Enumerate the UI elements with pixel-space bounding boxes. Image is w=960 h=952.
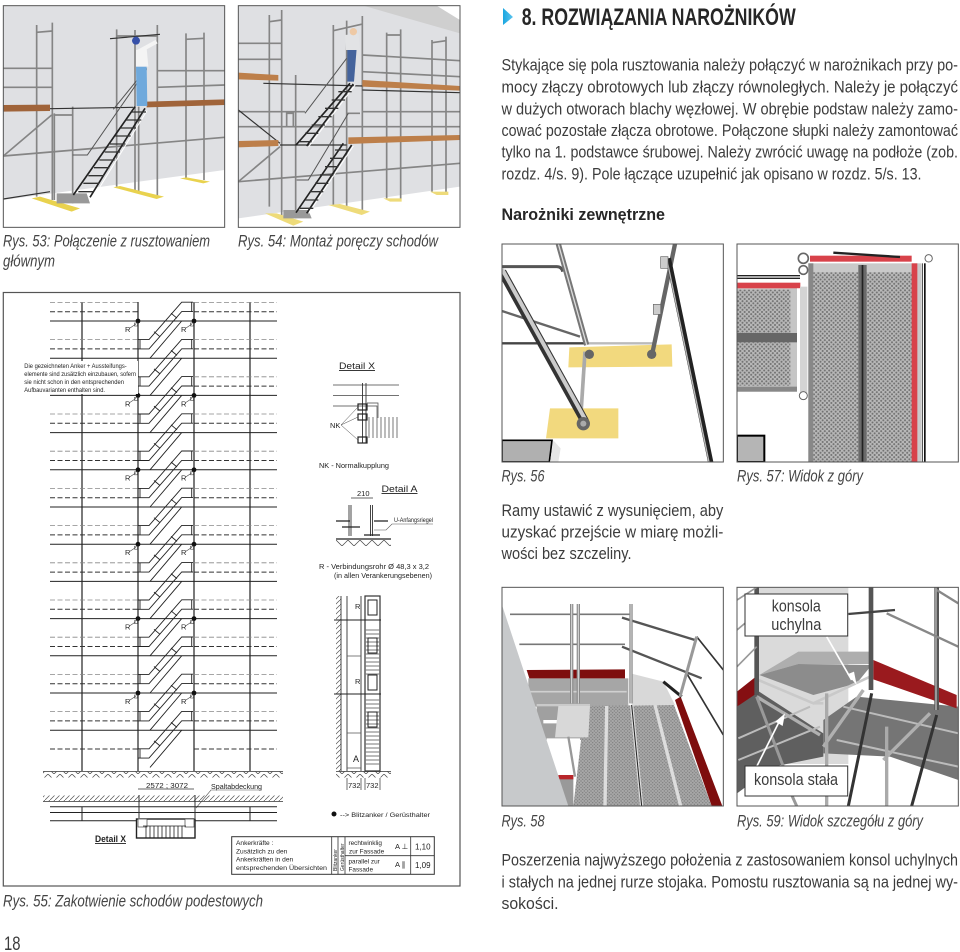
label: konsola stała [745,766,848,796]
side elevation: R [355,602,361,611]
elevation of stair tower: R [125,400,131,408]
table: anchor forces: Ankerkräften in den [236,856,294,864]
panel: Rys. 57 view from above [737,244,958,462]
Detail A drawing: 210 [357,489,370,498]
caption: Rys. 53: Rys. 53: Połączenie z rusztowaniem [3,232,210,251]
label: konsola uchylna: konsola [772,598,822,616]
note: anchors: Aufbauvarianten enthalten sind. [24,387,105,394]
side elevation: --> Blitzanker / Gerüsthalter [340,812,431,819]
caption: Rys. 53 [3,232,210,271]
panel: Rys. 56 base plates [502,244,723,462]
Detail A drawing: U-Anfangsriegel [394,518,433,524]
text block: frames offset [501,501,724,563]
caption: Rys. 57: Rys. 57: Widok z góry [737,467,864,486]
elevation of stair tower: R [181,548,187,557]
table: anchor forces: Ankerkräfte : [236,840,274,847]
note: anchors: sie nicht schon in den entsprechenden [24,379,124,386]
text block: frames offset: uzyskać przejście w miarę możli- [502,522,723,542]
table: anchor forces: A ⊥ [395,842,409,851]
elevation of stair tower: R [125,325,131,334]
side elevation: A [353,754,359,764]
side elevation: 732 [366,781,379,790]
caption: Rys. 54: Rys. 54: Montaż poręczy schodów [238,232,439,251]
table: anchor forces: Gerüsthalter [340,843,346,871]
panel: Rys. 54 handrail assembly [238,6,460,227]
elevation of stair tower: R [125,622,131,632]
Detail X drawing [319,361,399,470]
intro text block [501,56,958,184]
panel: Rys. 53 scaffold connected to main scaffold [3,6,225,227]
panel: Rys. 59 detail view with consoles [737,587,958,806]
elevation of stair tower: R [181,622,187,632]
text block: consoles [502,851,958,913]
caption: Rys. 58: Rys. 58 [502,812,545,831]
table: anchor forces: 1,09 [415,861,431,870]
Detail X drawing: NK [330,421,340,430]
elevation of stair tower: R [181,400,187,408]
note: anchors: elemente sind zusätzlich einzubauen, sofern [24,371,136,378]
elevation of stair tower: R [125,474,131,482]
side elevation: 732 [348,781,361,790]
table: anchor forces [232,837,434,874]
Detail A drawing: Detail A [382,484,418,494]
text block: consoles: sokości. [502,894,558,913]
caption: Rys. 55: Rys. 55: Zakotwienie schodów podestowych [3,892,263,911]
label: konsola uchylna: uchylna [771,616,822,634]
table: anchor forces: 1,10 [415,842,431,852]
note: anchors: Die gezeichneten Anker + Aussteifungs- [24,363,127,370]
title: 8. ROZWIĄZANIA NAROŻNIKÓW [522,3,796,31]
label: konsola uchylna [745,594,848,636]
side elevation [332,596,431,819]
elevation of stair tower: R [181,474,187,482]
table: anchor forces: entsprechenden Übersichten [236,864,327,872]
elevation of stair tower: R [181,325,187,334]
text block: frames offset: wości bez szczeliny. [501,544,632,563]
caption: Rys. 56: Rys. 56 [502,467,545,486]
table: anchor forces: Fassade [348,866,373,874]
note: anchors [22,361,138,394]
Detail A drawing: (in allen Verankerungsebenen) [334,571,432,580]
label: konsola stała: konsola stała [754,771,839,789]
table: anchor forces: rechtwinklig [348,840,382,847]
table: anchor forces: Blitzanker [333,849,339,871]
table: anchor forces: A ∥ [395,860,405,869]
table: anchor forces: parallel zur [348,858,381,866]
side elevation: R [355,677,361,686]
elevation of stair tower: R [125,697,131,706]
subheading: Narożniki zewnętrzne [502,205,665,224]
panel: Rys. 55 anchoring drawing [3,292,460,886]
elevation of stair tower: R [181,697,187,706]
Detail X drawing: Detail X [339,361,375,371]
caption: Rys. 53: głównym [3,252,55,271]
Detail A drawing: R - Verbindungsrohr Ø 48,3 x 3,2 [319,562,429,571]
panel: Rys. 58 top level widening [502,587,723,806]
blue arrow bullet [503,8,513,25]
table: anchor forces: zur Fassade [349,848,385,856]
Detail A drawing [319,484,433,580]
plan view and dimensions: 2572 ; 3072 [146,781,188,790]
Detail X drawing: NK - Normalkupplung [319,461,389,470]
elevation of stair tower: R [125,548,131,557]
plan view and dimensions: Detail X [95,834,126,844]
text block: frames offset: Ramy ustawić z wysunięciem, aby [502,501,724,520]
plan view and dimensions: Spaltabdeckung [211,784,262,791]
plan view and dimensions [43,781,283,844]
elevation of stair tower [43,302,283,778]
table: anchor forces: Zusätzlich zu den [236,848,288,856]
